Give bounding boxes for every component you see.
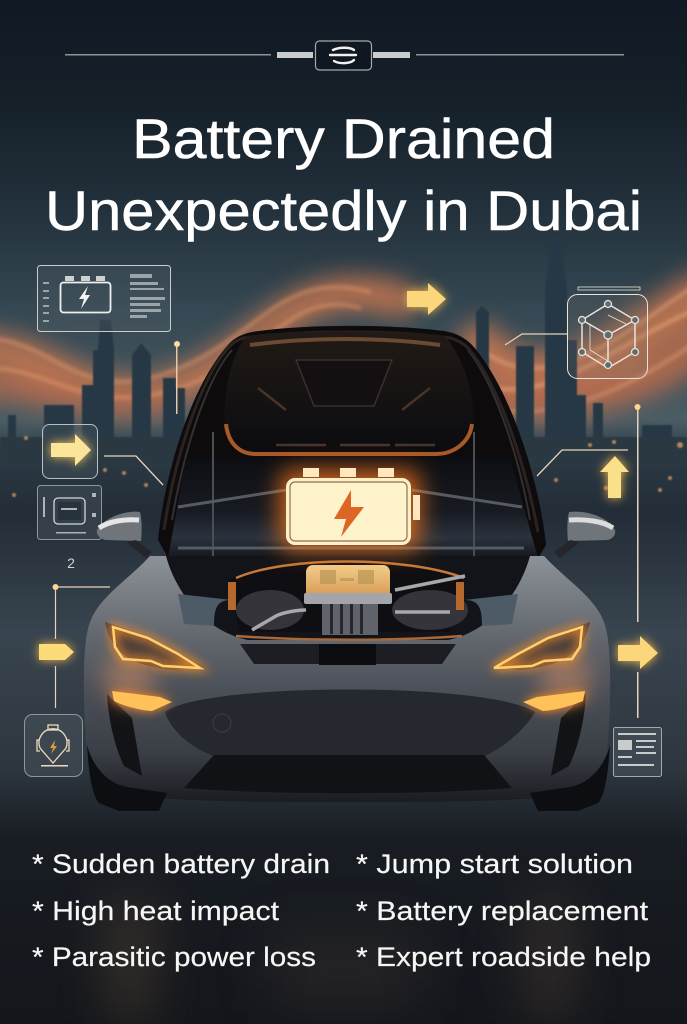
icon: glowing battery <box>280 468 420 550</box>
panel: small module <box>38 486 102 540</box>
fog light left <box>112 691 172 711</box>
engine bay <box>178 561 518 640</box>
title <box>45 107 642 242</box>
warm body reflections <box>104 652 156 704</box>
icon: arrow right mid <box>618 636 658 669</box>
right column <box>356 849 651 972</box>
left column: * Sudden battery drain <box>32 849 330 879</box>
small label: 2 <box>67 555 75 571</box>
connector to hood left <box>104 456 163 485</box>
city lights <box>12 436 683 497</box>
mirror right <box>554 512 615 558</box>
bonnet lip <box>166 556 530 640</box>
tyres <box>87 745 167 811</box>
bullet list <box>32 849 651 972</box>
wet floor reflection <box>110 900 570 1020</box>
under-hood cavity <box>168 458 538 558</box>
icon: arrow box left <box>42 424 98 478</box>
glowing connector left top <box>174 341 180 414</box>
city skyline <box>0 240 687 467</box>
headlight left <box>105 622 204 670</box>
under-hood light strips <box>178 490 524 548</box>
icon: arrow left mid <box>39 644 74 660</box>
bumper side intakes <box>107 694 142 776</box>
right column: * Expert roadside help <box>356 942 651 972</box>
mirror left <box>97 512 152 558</box>
panel: small chart module <box>614 728 662 776</box>
connector right upper <box>537 450 628 476</box>
top emblem divider <box>65 41 624 70</box>
connector right vertical <box>634 404 640 718</box>
left column <box>32 849 330 972</box>
lower intake <box>184 755 512 793</box>
right column: * Jump start solution <box>356 849 633 879</box>
panel: battery dashboard <box>38 266 170 332</box>
connector to cube <box>505 334 567 345</box>
bumper dark panel <box>165 690 535 758</box>
icon: yellow arrow top centre <box>407 283 446 315</box>
right column: * Battery replacement <box>356 896 649 926</box>
left column: * High heat impact <box>32 896 280 926</box>
open hood <box>158 326 546 565</box>
front grille <box>240 644 456 665</box>
title: Battery Drained <box>132 107 555 170</box>
headlight right <box>492 622 590 670</box>
left column: * Parasitic power loss <box>32 942 316 972</box>
orange smoke waves <box>0 283 687 412</box>
title: Unexpectedly in Dubai <box>45 179 642 242</box>
car <box>84 326 615 811</box>
hood struts <box>213 432 474 562</box>
body <box>84 556 610 802</box>
connector left mid <box>52 584 110 708</box>
icon: engine battery <box>24 714 82 776</box>
icon: up arrow <box>600 456 629 498</box>
fog light right <box>523 691 585 711</box>
panel: cube icon <box>568 287 648 378</box>
